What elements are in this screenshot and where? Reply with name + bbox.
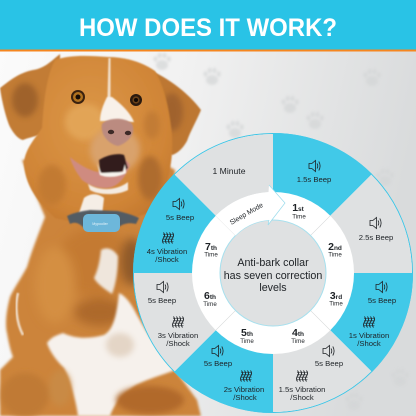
step 4 (279, 327, 343, 402)
step 5: 5th (241, 327, 253, 339)
sleep mode arrow (216, 185, 285, 236)
step 6 (148, 282, 217, 348)
label: 1 minute: 1 Minute (213, 166, 246, 176)
step 3: Time (329, 300, 343, 308)
center circle (220, 220, 326, 326)
center text: has seven correction (224, 270, 322, 282)
step 3: 3rd (330, 290, 342, 302)
step 2 (328, 218, 393, 258)
step 1: Time (292, 214, 306, 220)
sector: 1st (273, 133, 372, 273)
center text: levels (259, 282, 287, 294)
center text: Anti-bark collar (237, 257, 309, 269)
dog white chest patch (47, 293, 175, 416)
step 6: 6th (204, 290, 216, 302)
sleep mode label: Sleep Mode (229, 202, 265, 227)
step 7: /Shock (155, 255, 179, 264)
step 7 (147, 198, 218, 264)
dog photo illustration (0, 54, 201, 416)
step 6: 5s Beep (148, 296, 176, 305)
sector: 2nd (273, 175, 412, 273)
paw prints background (154, 53, 409, 410)
step 2: 2.5s Beep (359, 233, 393, 242)
step 3: /Shock (357, 339, 381, 348)
step 6: 3s Vibration (158, 331, 198, 340)
sector: 6th (134, 273, 273, 371)
step 4: /Shock (290, 393, 314, 402)
step 7: 7th (205, 241, 217, 253)
step 3: 5s Beep (368, 296, 396, 305)
center text (224, 257, 322, 294)
step 3: 1s Vibration (349, 331, 389, 340)
sector: 4th (273, 273, 371, 412)
dog collar: Mypooller (92, 222, 109, 226)
dog chest fur (1, 228, 184, 416)
dog nose (102, 119, 133, 146)
sector: 1 minute (175, 134, 273, 273)
step 5 (204, 327, 264, 402)
title: HOW DOES IT WORK? (79, 14, 337, 42)
step 5: Time (240, 338, 254, 345)
step 7: 4s Vibration (147, 247, 187, 256)
step 2: 2nd (328, 241, 342, 253)
dog left eye (71, 90, 85, 104)
step 4: Time (291, 338, 305, 345)
dog right eye (130, 94, 142, 106)
dog neck white fur (78, 194, 104, 216)
sector: 7th (133, 174, 273, 273)
dog mouth (70, 154, 130, 194)
step 4: 5s Beep (315, 359, 343, 368)
header band (0, 0, 416, 52)
step 4: 1.5s Vibration (279, 385, 325, 394)
sector: 5th (174, 273, 273, 413)
step 1: 1.5s Beep (297, 175, 331, 184)
step 4: 4th (292, 327, 304, 339)
dog head (24, 56, 172, 223)
step 2: Time (328, 252, 342, 258)
step 5: /Shock (233, 393, 257, 402)
dog left ear (0, 54, 62, 140)
white ring (192, 192, 354, 354)
step 7: 5s Beep (166, 213, 194, 222)
dog collar (67, 210, 139, 232)
sector: 3rd (273, 273, 413, 372)
dog white blaze (100, 58, 134, 122)
step 6: /Shock (166, 339, 190, 348)
dog muzzle (90, 127, 140, 173)
dog body (0, 150, 201, 416)
step 1: 1st (292, 202, 305, 214)
step 5: 2s Vibration (224, 385, 264, 394)
step 5: 5s Beep (204, 359, 232, 368)
outer ring (134, 134, 412, 412)
step 1 (292, 160, 331, 220)
step 6: Time (203, 301, 217, 308)
circular diagram (133, 133, 413, 413)
step 3 (329, 282, 396, 348)
dog face shading (38, 104, 162, 205)
step 7: Time (204, 252, 218, 258)
dog right ear (145, 68, 201, 155)
